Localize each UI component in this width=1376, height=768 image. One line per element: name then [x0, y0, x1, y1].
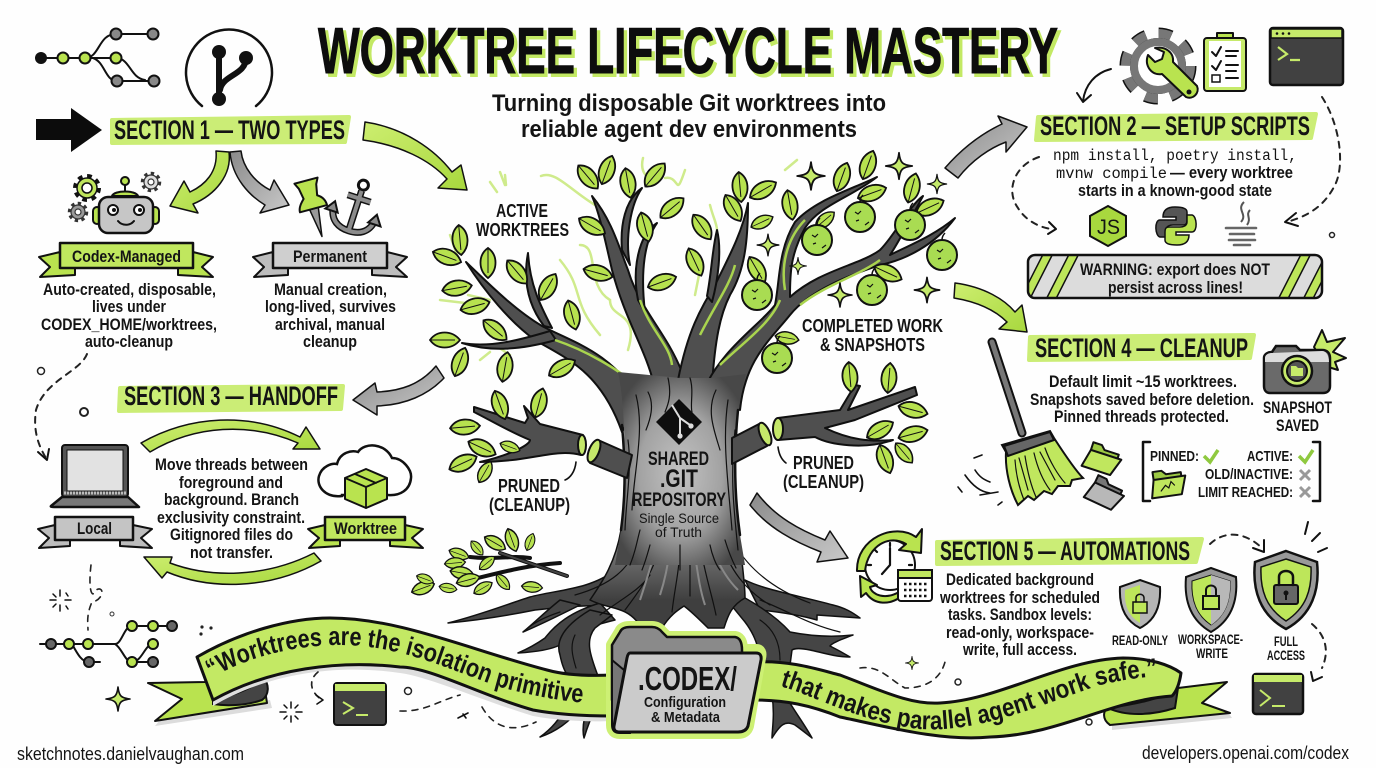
label: pruned right: PRUNED: [793, 453, 854, 473]
text: shared .git repository: .GIT: [660, 465, 698, 493]
heading: section 5: SECTION 5 — AUTOMATIONS: [940, 536, 1190, 566]
subtitle: reliable agent dev environments: [521, 116, 857, 143]
text: permanent description: [265, 281, 396, 351]
banner: worktree: Worktree: [334, 519, 397, 538]
title: [318, 14, 1061, 90]
text: permanent description: cleanup: [303, 333, 357, 351]
icon: green folder: [1082, 441, 1124, 477]
checklist panel: PINNED:: [1150, 448, 1199, 465]
arrow: gear to section 2: [1077, 69, 1111, 102]
subtitle: Turning disposable Git worktrees into: [492, 90, 886, 117]
text: codex-managed description: [41, 281, 217, 351]
icon: node.js hexagon: JS: [1097, 216, 1120, 239]
label: completed work and snapshots: & SNAPSHOTS: [820, 335, 925, 355]
icon: git branch circle: [186, 30, 272, 106]
doodles left: [50, 565, 213, 636]
text: setup scripts description: starts in a known-good state: [1078, 182, 1272, 200]
label: pruned left: (CLEANUP): [489, 495, 570, 515]
arrow: tree to section 2: [945, 116, 1027, 178]
tree: pruned branch right: [773, 361, 929, 476]
text: codex-managed description: auto-cleanup: [85, 333, 173, 351]
text: codex-managed description: CODEX_HOME/worktrees,: [41, 316, 217, 334]
text: shared .git repository: Single Source: [639, 510, 719, 526]
banner: codex-managed: Codex-Managed: [72, 247, 181, 266]
text: cleanup description: Snapshots saved before deletion.: [1030, 391, 1254, 409]
label: snapshot saved: SAVED: [1276, 417, 1319, 435]
doodles bottom-center: [280, 672, 536, 728]
icon: laptop: [51, 445, 139, 507]
arrow: handoff bottom: [144, 553, 321, 584]
arrow: tree to section 3: [353, 366, 444, 415]
text: setup scripts description: npm install, poetry install,: [1053, 147, 1297, 165]
text: .codex label: & Metadata: [651, 709, 721, 726]
arrow: section 1 to permanent: [230, 151, 289, 213]
icon: python: [1156, 207, 1196, 245]
footer: left: sketchnotes.danielvaughan.com: [17, 744, 244, 764]
text: setup scripts description: — every worktree: [1170, 164, 1293, 182]
labels: sandbox levels: WRITE: [1196, 646, 1228, 661]
banner: permanent: [253, 243, 407, 277]
label: completed work and snapshots: [802, 316, 943, 355]
icon: anchor: [321, 171, 393, 240]
text: shared .git repository: SHARED: [648, 449, 709, 470]
heading: section 4: [1029, 333, 1254, 363]
text: handoff description: [155, 456, 308, 562]
arrow: black pointer: [36, 108, 102, 152]
text: handoff description: Move threads between: [155, 456, 308, 474]
ribbon: right band with quote: that makes parallel agent work safe.”: [782, 658, 1155, 732]
text: codex-managed description: lives under: [92, 298, 166, 316]
tree: apples: [742, 195, 957, 373]
icon: robot: [70, 174, 159, 233]
icon: terminal top-right: [1270, 28, 1343, 85]
tree: leaves: [430, 148, 947, 383]
label: snapshot saved: [1263, 399, 1332, 435]
fallen twig with leaves: [410, 527, 567, 598]
arrow: tree to section 4: [954, 283, 1027, 332]
banner: local: [38, 517, 152, 548]
ribbon: left tail: [148, 677, 272, 726]
icon: folder .codex: [612, 627, 761, 733]
banner: local: Local: [77, 519, 112, 538]
arrow: tree to section 5: [750, 493, 848, 562]
checklist panel: [1143, 442, 1320, 501]
labels: sandbox levels: WORKSPACE-: [1178, 632, 1243, 647]
icon: gray folder: [1084, 474, 1127, 512]
label: pruned left: PRUNED: [498, 476, 560, 496]
icon: clock with calendar: [857, 529, 932, 603]
footer: right: developers.openai.com/codex: [1142, 743, 1349, 763]
tree: roots: [448, 530, 860, 676]
text: setup scripts description: mvnw compile: [1056, 165, 1167, 183]
text: setup scripts description: [1053, 147, 1297, 200]
banner: permanent: Permanent: [293, 247, 367, 266]
icon: shield workspace-write: [1186, 568, 1236, 632]
tree: branches: [462, 177, 955, 432]
heading: section 3: [119, 381, 343, 411]
icon: broom: [958, 342, 1083, 505]
icon: camera with burst: [1264, 330, 1346, 393]
checklist panel: LIMIT REACHED:: [1198, 484, 1293, 501]
icon: sparkle bottom-left: [106, 687, 130, 711]
heading: section 1: [112, 115, 349, 145]
heading: section 4: SECTION 4 — CLEANUP: [1035, 333, 1248, 363]
dashed arrows: setup: [1012, 97, 1340, 238]
text: cleanup description: Pinned threads protected.: [1054, 408, 1229, 426]
tree: green energy swirls: [440, 158, 797, 360]
tree: sparkles: [757, 153, 947, 307]
icon: terminal bottom-right: [1253, 674, 1303, 714]
text: permanent description: Manual creation,: [274, 281, 387, 299]
warning bar: [1026, 254, 1324, 300]
tree: pruned branch left: [446, 387, 586, 485]
arrow: section 1 to codex-managed: [170, 151, 229, 213]
text: handoff description: not transfer.: [190, 544, 273, 562]
arrow: section 1 to tree: [363, 122, 467, 190]
labels: sandbox levels: ACCESS: [1267, 648, 1305, 663]
arrow: handoff top: [141, 420, 320, 452]
icon: git graph bottom-left: [40, 621, 177, 667]
text: handoff description: Gitignored files do: [170, 526, 293, 544]
text: automations description: [939, 571, 1100, 659]
banner: worktree: [308, 517, 423, 548]
icon: cloud with box: [318, 445, 411, 508]
text: automations description: read-only, workspace-: [946, 624, 1094, 642]
text: handoff description: exclusivity constraint.: [157, 509, 305, 527]
labels: sandbox levels: READ-ONLY: [1112, 633, 1168, 648]
text: handoff description: foreground and: [179, 474, 283, 492]
subtitle: [492, 90, 886, 143]
text: .codex label: [638, 660, 737, 726]
text: .codex label: .CODEX/: [638, 660, 737, 697]
text: .codex label: Configuration: [644, 694, 726, 711]
banner: codex-managed: [39, 243, 213, 277]
ribbon: right tail: [1104, 682, 1232, 730]
icon: shield read-only: [1120, 580, 1160, 628]
icon: shield full access: [1254, 551, 1318, 629]
checklist panel: OLD/INACTIVE:: [1205, 466, 1293, 483]
heading: section 1: SECTION 1 — TWO TYPES: [114, 115, 345, 145]
text: permanent description: long-lived, survives: [265, 298, 396, 316]
dashed arrows: automations: [860, 522, 1327, 725]
label: active worktrees: [476, 201, 569, 240]
label: active worktrees: ACTIVE: [496, 201, 548, 221]
tree: roots under ribbon: [540, 695, 812, 738]
tree: trunk: [615, 372, 746, 570]
label: completed work and snapshots: COMPLETED WORK: [802, 316, 943, 336]
label: snapshot saved: SNAPSHOT: [1263, 399, 1332, 417]
label: active worktrees: WORKTREES: [476, 220, 569, 240]
icon: git logo diamond: [656, 399, 702, 445]
ribbon: left band with quote: “Worktrees are the isolation primitive: [206, 629, 583, 702]
heading: section 5: [937, 536, 1202, 566]
text: automations description: write, full access.: [962, 641, 1077, 659]
icon: gear and wrench: [1127, 35, 1198, 98]
labels: sandbox levels: FULL: [1274, 634, 1298, 649]
icon: java: [1226, 202, 1256, 245]
labels: sandbox levels: [1112, 632, 1305, 663]
heading: section 3: SECTION 3 — HANDOFF: [124, 381, 338, 411]
text: shared .git repository: [632, 449, 726, 540]
icon: clipboard checklist: [1204, 33, 1246, 91]
text: automations description: worktrees for scheduled: [939, 589, 1100, 607]
text: automations description: tasks. Sandbox levels:: [948, 606, 1092, 624]
text: cleanup description: Default limit ~15 worktrees.: [1049, 373, 1237, 391]
dashed arrow: section 1 to local: [35, 354, 88, 460]
label: pruned right: [778, 447, 864, 492]
text: permanent description: archival, manual: [275, 316, 385, 334]
icon: terminal bottom-center: [334, 683, 386, 725]
warning bar: persist across lines!: [1108, 279, 1243, 297]
icon: push pin: [292, 177, 335, 240]
text: shared .git repository: of Truth: [655, 524, 702, 540]
text: automations description: Dedicated background: [946, 571, 1094, 589]
text: handoff description: background. Branch: [164, 491, 299, 509]
label: pruned left: [489, 462, 576, 515]
icon: node.js hexagon: [1090, 206, 1126, 246]
text: shared .git repository: REPOSITORY: [632, 490, 726, 511]
warning bar: WARNING: export does NOT: [1080, 261, 1270, 279]
text: codex-managed description: Auto-created, disposable,: [43, 281, 216, 299]
text: cleanup description: [1030, 373, 1254, 426]
tree: cut stubs: [585, 421, 774, 478]
icon: git graph top-left: [35, 28, 160, 86]
label: pruned right: (CLEANUP): [783, 472, 864, 492]
checklist panel: ACTIVE:: [1247, 448, 1293, 465]
